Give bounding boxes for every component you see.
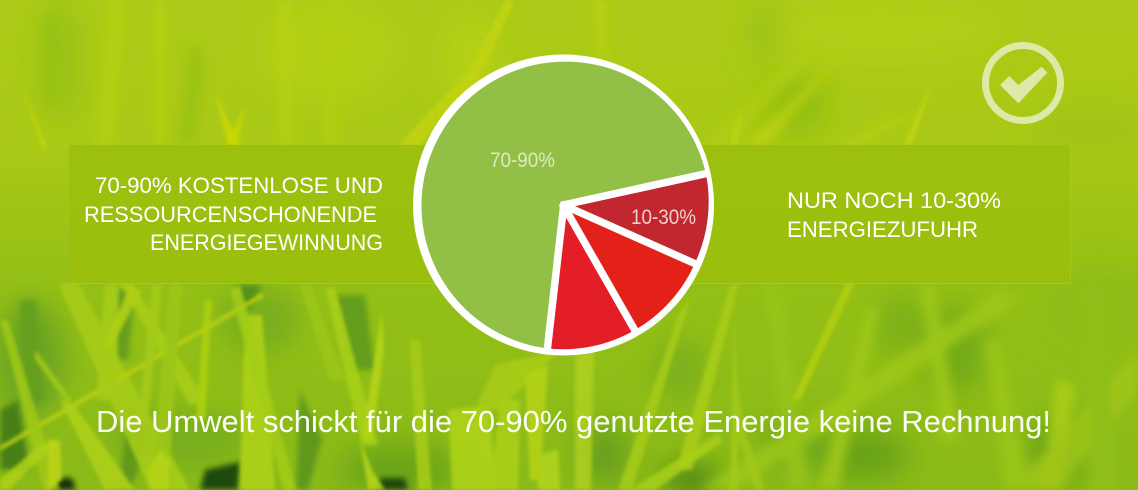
slice separators — [547, 173, 709, 352]
mid-distance right blades — [700, 285, 1138, 490]
slice: 70-90% green — [422, 62, 706, 349]
text: left description: RESSOURCENSCHONENDE — [84, 202, 377, 227]
bottom headline: Die Umwelt schickt für die 70-90% genutzte Energie keine Rechnung! — [96, 404, 1051, 439]
pie label: 10-30%: 10-30% — [631, 205, 696, 229]
dark gaps between blades — [0, 285, 408, 490]
foreground left blades — [0, 283, 560, 490]
text: left description: ENERGIEGEWINNUNG — [150, 230, 383, 255]
text: right description: NUR NOCH 10-30% — [787, 188, 1001, 213]
text: left description — [84, 173, 383, 255]
pie chart — [413, 54, 714, 356]
text: left description: 70-90% KOSTENLOSE UND — [95, 173, 383, 198]
upper blades — [44, 0, 915, 150]
pie label: 70-90%: 70-90% — [490, 148, 555, 172]
text: right description: ENERGIEZUFUHR — [787, 217, 978, 242]
text: right description — [787, 188, 1001, 242]
slice: red segment — [564, 205, 695, 330]
slice: 10-30% dark red — [564, 174, 709, 263]
translucent band panel — [69, 145, 1071, 284]
icon: check mark in circle — [986, 46, 1060, 120]
slice: crimson segment — [548, 205, 635, 349]
